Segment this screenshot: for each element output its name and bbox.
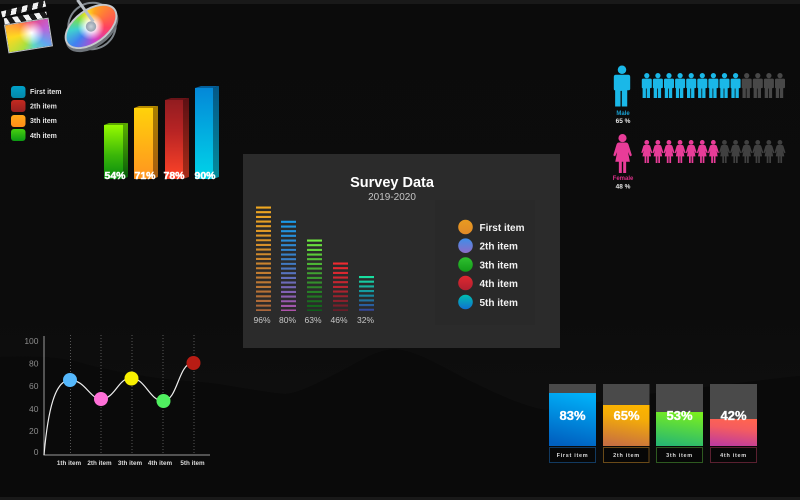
card: 53% [656,384,703,462]
icon: large male [614,66,630,106]
female icon row [641,140,786,163]
card: 53%: 3th item [666,453,693,459]
card: 53%: 53% [666,408,693,423]
bar: 71% [134,106,158,179]
bar value labels: 54% [104,170,126,182]
y axis labels: 100 [24,336,39,346]
legend: survey: 2th item [480,242,518,253]
icon: large female [613,134,632,173]
data points [63,356,200,408]
card: 83% [549,384,596,462]
male value: 65 % [616,118,631,125]
bar value labels: 90% [194,170,216,182]
card: 42% [710,384,757,462]
y axis labels: 20 [29,426,39,436]
x axis labels [57,460,205,467]
male icon row [642,73,785,98]
y axis labels: 0 [34,447,39,457]
panel: survey data [243,154,560,348]
segment chart values: 32% [357,315,374,325]
segment chart values: 96% [253,315,271,325]
female value: 48 % [616,184,631,190]
male label: Male [616,111,630,117]
axes [44,336,210,455]
line [44,363,193,455]
bar value labels: 71% [134,170,156,182]
bar chart: 3D percentages [104,86,219,182]
female label: Female [613,176,634,182]
x axis labels: 1th item [57,460,81,467]
segment chart values: 63% [304,315,322,325]
segment chart values: 46% [330,315,348,325]
legend: 3D bars: First item [30,89,62,96]
legend: 3D bars: 4th item [30,133,57,140]
bar value labels [104,170,216,182]
subtitle: 2019-2020 [368,192,416,203]
card: 65%: 2th item [613,453,640,459]
x axis labels: 3th item [118,460,142,467]
segment chart values [253,315,374,325]
icon: clapperboard [1,0,53,54]
legend: 3D bars [11,86,62,141]
card: 65% [603,384,650,462]
card: 42%: 42% [720,408,747,423]
legend: survey: First item [480,223,525,234]
bar value labels: 78% [163,170,185,182]
pictogram: female [613,134,786,190]
legend: 3D bars: 2th item [30,104,57,110]
card: 65%: 65% [613,408,640,423]
icon: motion gyroscope [64,0,118,52]
gauge cards [549,384,757,462]
stacked segment chart [264,206,366,311]
segment chart values: 80% [279,315,296,325]
bar: 78% [165,98,189,179]
legend: survey: 5th item [480,298,518,309]
legend: survey: 4th item [480,279,518,290]
y axis labels: 60 [29,381,39,391]
legend: survey [458,220,525,309]
x axis labels: 5th item [180,460,205,467]
pictogram: male [614,66,785,125]
title: Survey Data [350,175,435,191]
y axis labels: 80 [29,358,39,368]
card: 42%: 4th item [720,453,747,459]
x axis labels: 2th item [87,460,112,467]
y axis labels [24,336,39,457]
x axis labels: 4th item [148,460,172,467]
legend: 3D bars: 3th item [30,118,57,125]
card: 83%: 83% [559,408,586,423]
y axis labels: 40 [29,404,39,414]
legend: survey: 3th item [480,260,518,272]
line chart [24,335,210,467]
bar: 54% [104,123,128,179]
card: 83%: First item [557,453,588,459]
bar: 90% [195,86,219,179]
